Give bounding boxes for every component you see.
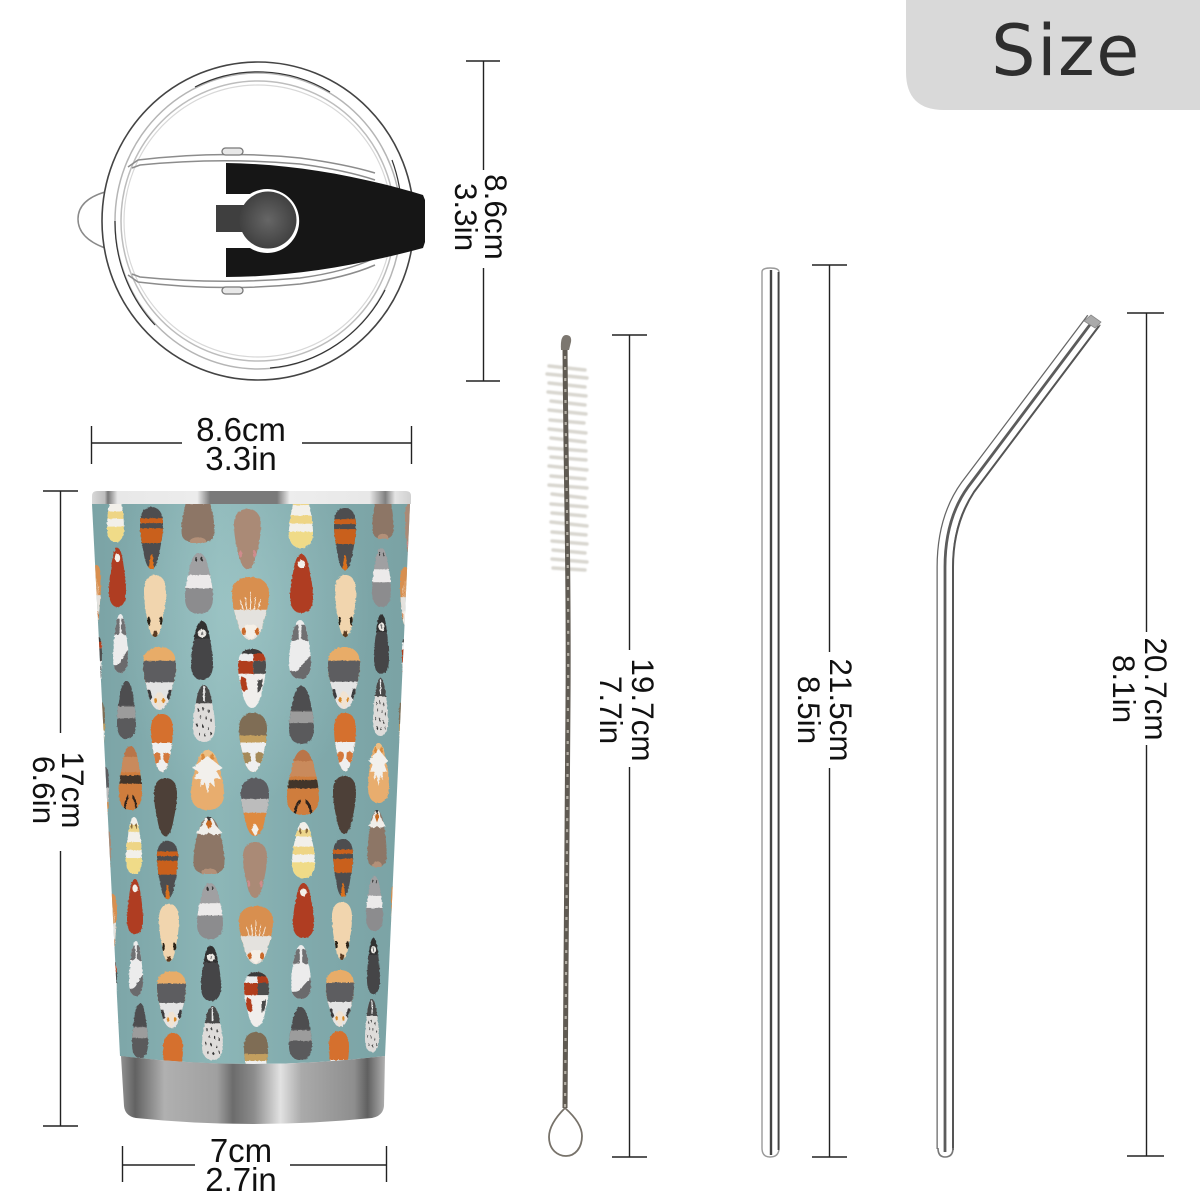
dimension: tumbler height: 17cm: [55, 751, 91, 829]
lid: sip opening: [216, 192, 296, 248]
dimension: tumbler top width: [91, 411, 412, 477]
tumbler: [92, 486, 415, 1124]
dimension: lid height: [448, 61, 514, 381]
dimension: tumbler top width: 3.3in: [205, 440, 277, 477]
dimension: tumbler height: [26, 491, 91, 1126]
lid: black slider: [226, 163, 425, 277]
dimension: brush length: 19.7cm: [625, 658, 661, 762]
dimension: brush length: 7.7in: [593, 676, 629, 744]
heading: Size: Size: [991, 10, 1141, 92]
dimension: tumbler bottom width: 7cm: [210, 1132, 272, 1169]
dimension: lid height: 3.3in: [448, 183, 484, 251]
dimension: straight straw length: 21.5cm: [823, 658, 859, 762]
lid: wire brackets: [128, 154, 375, 288]
dimension: tumbler top width: 8.6cm: [196, 411, 286, 448]
brush: bristles: [547, 366, 587, 570]
dimension: brush length: [593, 335, 661, 1157]
dimension: straight straw length: [791, 265, 859, 1157]
tumbler: guinea pig pattern: [92, 486, 415, 1091]
straight straw: [762, 268, 779, 1157]
dimension: bent straw length: 20.7cm: [1138, 637, 1174, 741]
cleaning brush: [547, 335, 587, 1156]
tumbler: steel rim: [92, 491, 411, 504]
dimension: tumbler bottom width: 2.7in: [205, 1161, 277, 1198]
dimension: bent straw length: [1106, 313, 1174, 1156]
dimension: bent straw length: 8.1in: [1106, 655, 1142, 723]
brush: tip: [561, 335, 571, 350]
dimension: tumbler height: 6.6in: [26, 756, 62, 824]
lid illustration: [78, 62, 425, 380]
brush: twisted wire: [565, 345, 568, 1108]
dimension: lid height: 8.6cm: [478, 174, 514, 260]
dimension: straight straw length: 8.5in: [791, 676, 827, 744]
brush: wire loop: [549, 1108, 582, 1156]
bent straw: [938, 315, 1101, 1157]
tumbler: steel base: [121, 1056, 385, 1124]
lid: sip tab: [78, 192, 105, 248]
panel: size tag: [906, 0, 1200, 110]
dimension: tumbler bottom width: [122, 1132, 386, 1198]
tumbler: painted body: [92, 504, 410, 1064]
